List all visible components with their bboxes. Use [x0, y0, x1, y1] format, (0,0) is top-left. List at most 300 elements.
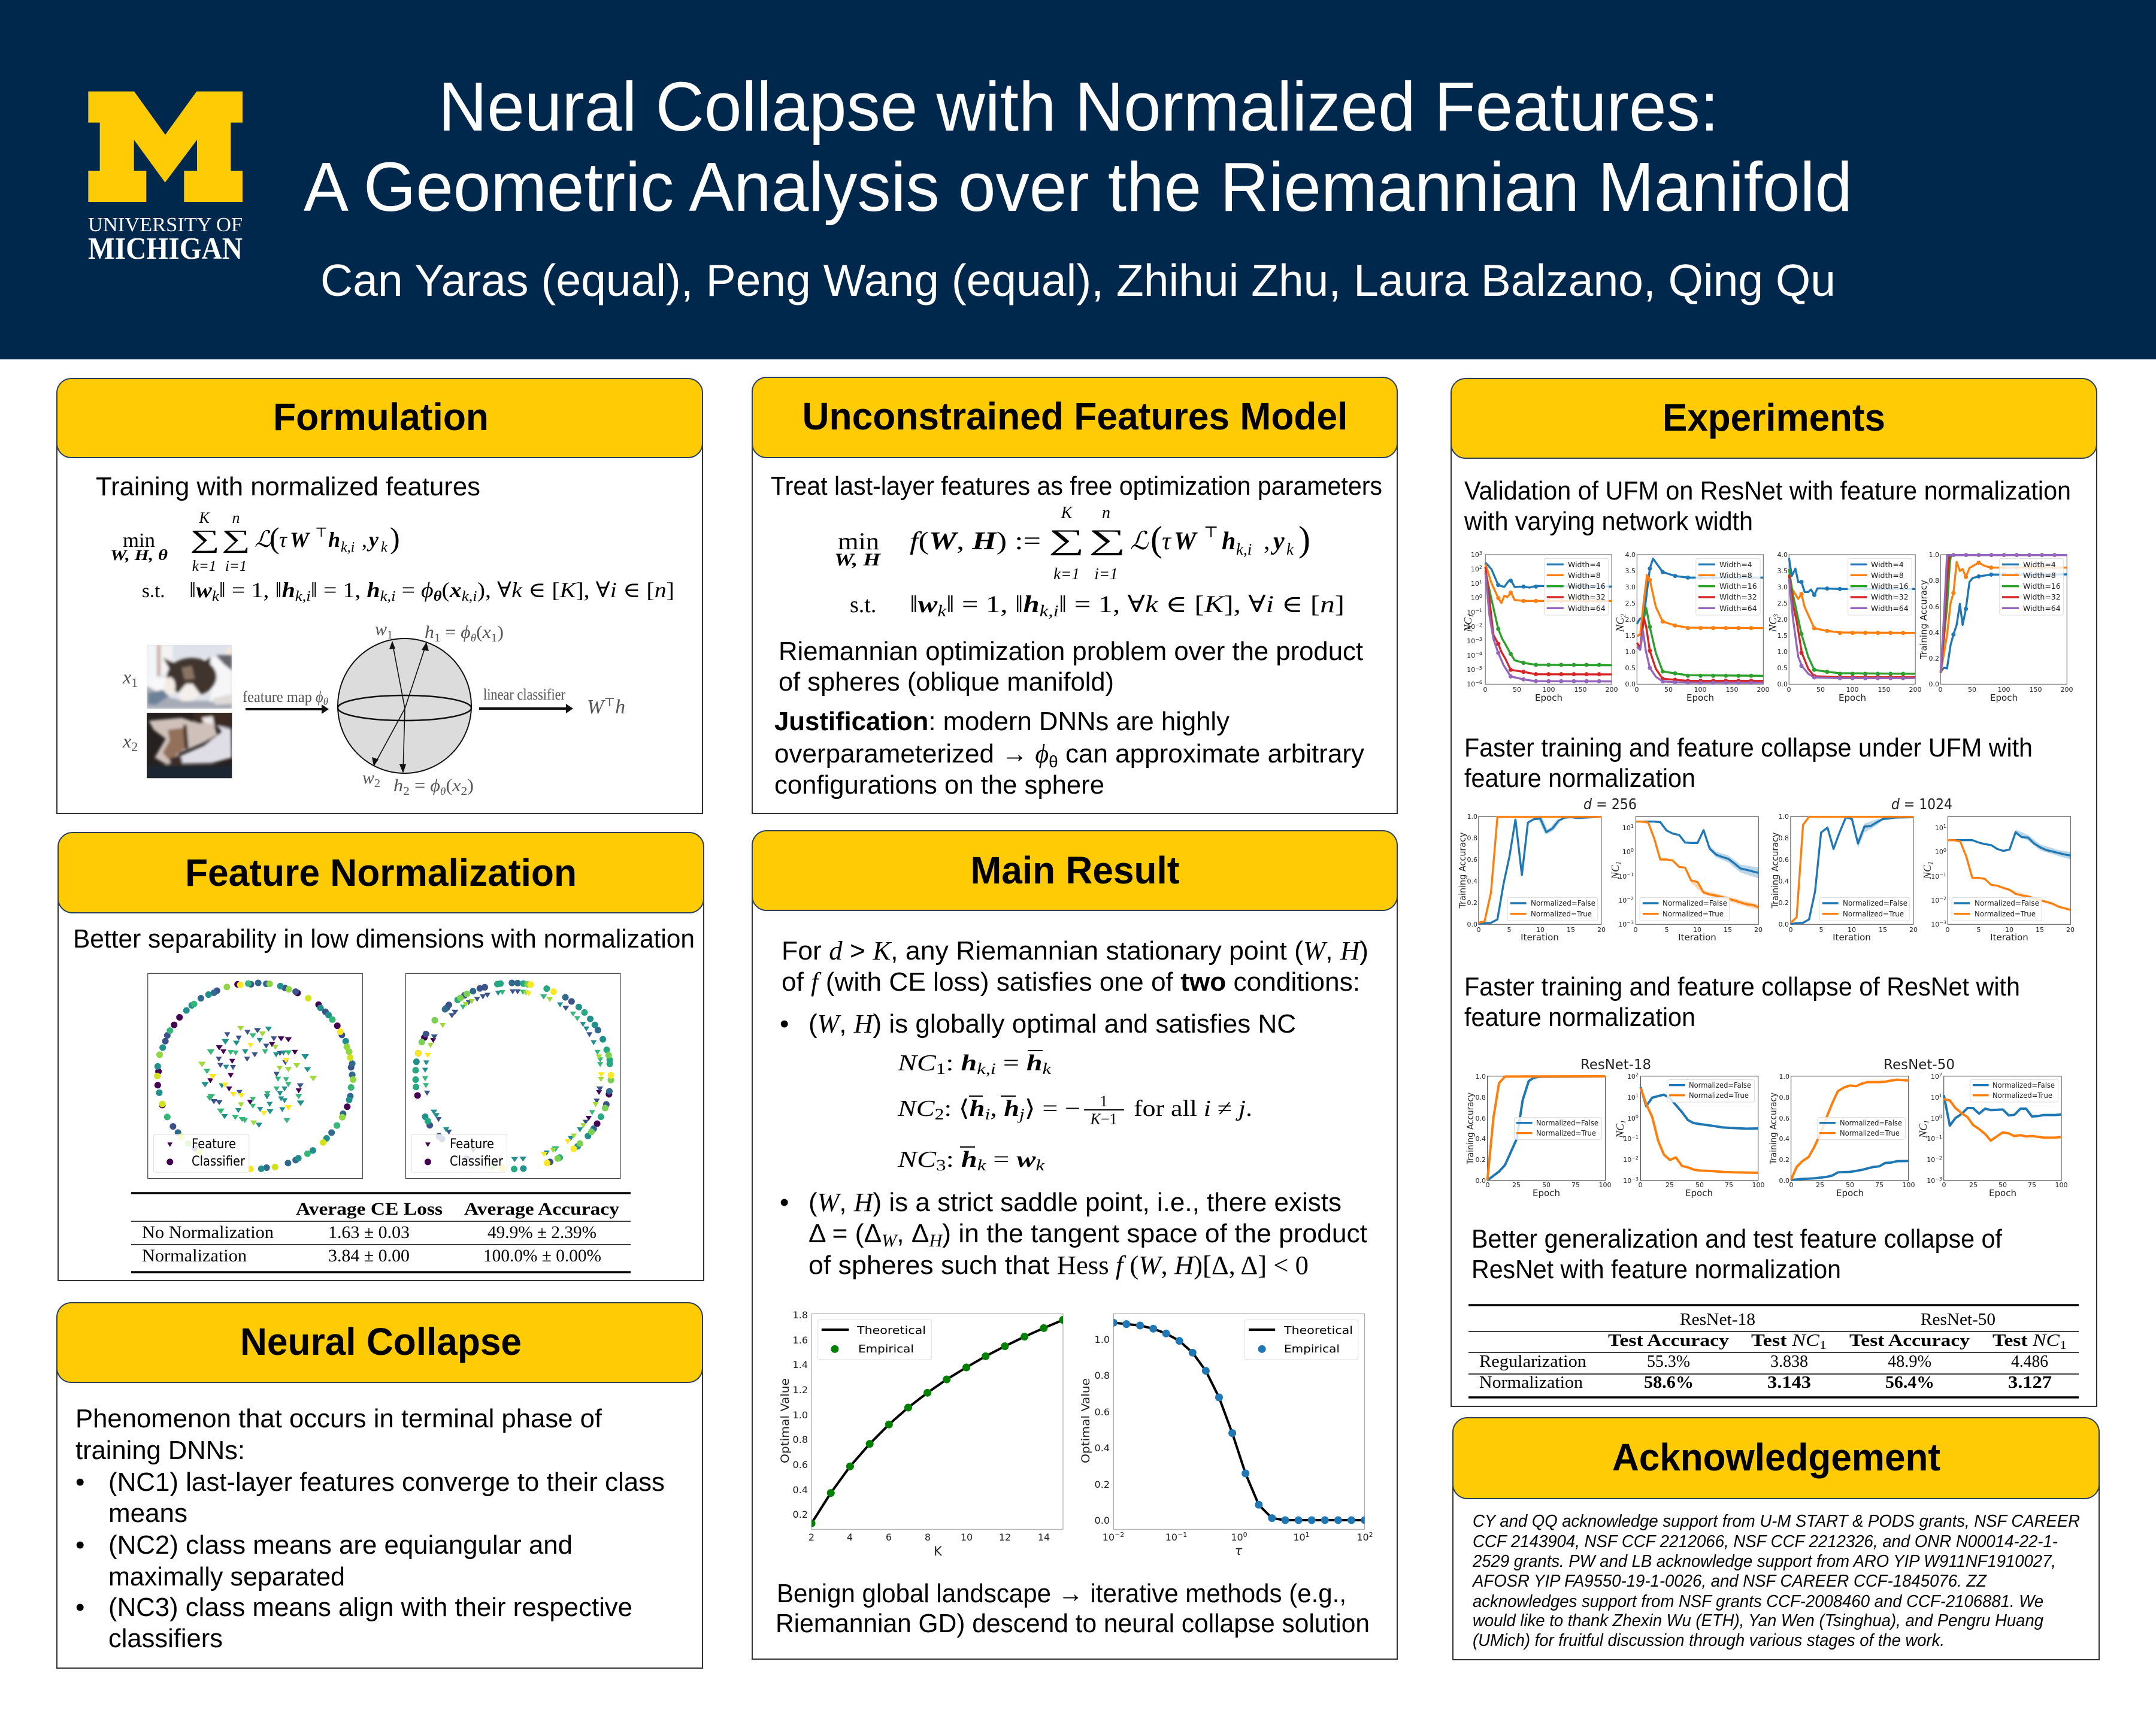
axis labels: ResNet experiments: 10 [1623, 1135, 1631, 1143]
chart: optimal value vs tau: 10 [1103, 1532, 1115, 1543]
axis labels: width experiments: Epoch [1990, 692, 2018, 703]
text: faster training of ResNet: Faster training and feature collapse of ResNet with [1464, 972, 2020, 1001]
chart: optimal value vs tau: 0.6 [1095, 1406, 1110, 1418]
axis labels: width experiments: NC [1614, 618, 1626, 632]
axis labels: width experiments: 2.5 [1778, 600, 1788, 607]
axis labels: width experiments: Width=4 [1719, 560, 1752, 569]
logo: University of Michigan: UNIVERSITY OF [88, 214, 243, 236]
axis labels: width experiments: 50 [1968, 686, 1976, 694]
axis labels: ResNet experiments: 1.0 [1779, 1073, 1789, 1081]
equation: UFM objective: W [1174, 528, 1198, 555]
axis labels: UFM experiments: Iteration [1990, 932, 2028, 943]
text: faster training of ResNet [1464, 972, 2020, 1032]
text: justification [774, 707, 1364, 800]
axis labels: ResNet experiments: Epoch [1533, 1188, 1560, 1199]
table: test accuracy and NC1: 4.486 [2011, 1352, 2048, 1371]
equation: training objective: ℒ [255, 527, 272, 552]
axis labels: ResNet experiments: −3 [1631, 1176, 1639, 1182]
table: CE loss and accuracy: 49.9% ± 2.39% [487, 1222, 596, 1242]
text: second condition: H [928, 1231, 944, 1251]
axis labels: width experiments: 10 [1471, 551, 1479, 559]
axis labels: UFM experiments: NC [1921, 865, 1933, 879]
diagram: feature map to sphere to linear classifier: 2 [461, 785, 467, 798]
axis labels: UFM experiments: −1 [1939, 872, 1946, 877]
axis labels: width experiments: 100 [1998, 686, 2010, 694]
axis labels: UFM experiments: 0.4 [1467, 877, 1477, 885]
axis labels: width experiments: 1 [1467, 614, 1475, 618]
axis labels: ResNet experiments: 2 [1636, 1072, 1639, 1078]
equations: NC1 NC2 NC3: i [985, 1106, 990, 1123]
axis labels: UFM experiments: Normalized=True [1975, 910, 2036, 918]
axis labels: width experiments: Epoch [1839, 692, 1866, 703]
equation: UFM objective: W, H [834, 550, 882, 570]
axis labels: width experiments: Width=8 [1871, 571, 1904, 580]
axis labels: ResNet experiments: 1 [1636, 1093, 1639, 1098]
axis labels: UFM experiments [1457, 795, 2075, 943]
axis labels: ResNet experiments: 0 [1639, 1181, 1642, 1189]
diagram: feature map to sphere to linear classifier: ϕ [461, 622, 470, 642]
axis labels: width experiments: 1.0 [1625, 648, 1636, 656]
equation: training objective: ( [442, 578, 450, 602]
axis labels: UFM experiments: Normalized=False [1531, 899, 1595, 907]
legend labels: scatter 2 [450, 1137, 504, 1169]
axis labels: width experiments: Width=4 [1871, 560, 1904, 569]
equations: NC1 NC2 NC3: : [946, 1051, 961, 1076]
axis labels: width experiments: Epoch [1535, 692, 1563, 703]
heading: neural collapse: Neural Collapse [240, 1320, 522, 1363]
chart: optimal value vs tau: 0 [1243, 1531, 1247, 1539]
text: training with normalized features: Training with normalized features [96, 472, 480, 501]
text: second condition: , Δ [897, 1219, 929, 1248]
text: better separability: Better separability in low dimensions with normalization [73, 924, 695, 954]
chart: optimal value vs K: 2 [808, 1532, 814, 1543]
axis labels: ResNet experiments: 0.0 [1476, 1177, 1486, 1185]
diagram: feature map to sphere to linear classifier: x [123, 666, 131, 688]
chart: NC1 ResNet-18 [1640, 1076, 1758, 1181]
axis labels: UFM experiments: 5 [1665, 926, 1669, 934]
equations: NC1 NC2 NC3: NC [897, 1147, 937, 1172]
equation: training objective: h [367, 578, 380, 602]
chart: scatter with normalization [405, 973, 620, 1178]
chart: optimal value vs tau: 0.2 [1095, 1479, 1110, 1490]
axis labels: width experiments: 0 [1483, 686, 1488, 694]
diagram: feature map to sphere to linear classifier: 2 [374, 777, 380, 790]
axis labels: width experiments: Epoch [1686, 692, 1714, 703]
axis labels: ResNet experiments: 75 [1875, 1181, 1884, 1189]
chart: optimal value vs tau: −1 [1177, 1531, 1187, 1539]
axis labels: width experiments: 10 [1471, 594, 1479, 602]
chart: optimal value vs K: K [934, 1544, 943, 1558]
equations: NC1 NC2 NC3: : [946, 1147, 961, 1172]
text: faster training under UFM [1464, 733, 2033, 793]
equation: UFM objective: ‖w [910, 591, 934, 618]
diagram: feature map to sphere to linear classifier: ( [446, 776, 452, 795]
chart: NC2 vs epoch by width [1637, 555, 1763, 684]
axis labels: ResNet experiments: 0 [1942, 1181, 1946, 1189]
axis labels: width experiments: 50 [1816, 686, 1825, 694]
axis labels: width experiments: 0.8 [1928, 577, 1939, 585]
legend labels: scatter 1: Classifier [192, 1154, 246, 1169]
axis labels: UFM experiments: 5 [1819, 926, 1823, 934]
axis labels: ResNet experiments: NC [1917, 1124, 1929, 1138]
axis labels: width experiments: 10 [1471, 565, 1479, 573]
axis labels: width experiments: 4.0 [1778, 551, 1788, 559]
text: theorem statement: of f (with CE loss) satisfies one of two conditions: [782, 967, 1360, 997]
axis labels: UFM experiments: −1 [1627, 872, 1634, 877]
equation: training objective: s.t. [142, 580, 165, 602]
equations: NC1 NC2 NC3: 3 [936, 1157, 946, 1174]
axis labels: UFM experiments: 0 [1943, 848, 1946, 853]
equations: NC1 NC2 NC3: k [1035, 1157, 1045, 1174]
equation: training objective [110, 509, 674, 604]
text: second condition: of spheres such that Hess f (W, H)[Δ, Δ] < 0 [808, 1251, 1309, 1280]
equation: training objective: ), ∀ [477, 578, 511, 602]
table: test accuracy and NC1: 55.3% [1647, 1352, 1690, 1371]
axis labels: width experiments: Width=8 [1568, 571, 1601, 580]
diagram: feature map to sphere to linear classifier: 2 [131, 739, 138, 754]
text: theorem statement [782, 936, 1368, 997]
equation: UFM objective: y [1270, 528, 1285, 555]
axis labels: UFM experiments: 0.8 [1779, 834, 1789, 842]
diagram: feature map to sphere to linear classifier: = [440, 622, 461, 642]
equation: UFM objective: n [1102, 504, 1110, 522]
axis labels: ResNet experiments: Normalized=False [1840, 1119, 1902, 1127]
equation: training objective: k ∈ [K], ∀i ∈ [n] [511, 578, 674, 602]
axis labels: UFM experiments: Iteration [1833, 932, 1871, 943]
chart: optimal value vs tau: τ [1235, 1544, 1243, 1558]
axis labels: UFM experiments: 10 [1935, 824, 1943, 832]
axis labels: ResNet experiments: −3 [1935, 1176, 1942, 1182]
text: validation of UFM: Validation of UFM on ResNet with feature normalization [1464, 476, 2071, 506]
axis labels: UFM experiments: 1 [1926, 861, 1934, 865]
axis labels: width experiments: 0 [1479, 594, 1482, 599]
diagram: feature map to sphere to linear classifier: w [375, 619, 387, 639]
title: Neural Collapse with Normalized Features: [438, 68, 1719, 146]
text: neural collapse description: Phenomenon that occurs in terminal phase of [75, 1404, 602, 1433]
axis labels: ResNet experiments: 0.4 [1779, 1135, 1789, 1143]
chart: optimal value vs K: 1.6 [793, 1334, 808, 1346]
table: test accuracy and NC1: ResNet-18 [1680, 1311, 1755, 1329]
axis labels: UFM experiments: d = 1024 [1891, 795, 1952, 813]
axis labels: ResNet experiments: 0.0 [1779, 1177, 1789, 1185]
axis labels: UFM experiments: 0.0 [1467, 921, 1477, 928]
axis labels: UFM experiments: Normalized=True [1531, 910, 1592, 918]
axis labels: UFM experiments: 1.0 [1779, 813, 1789, 821]
axis labels: width experiments: Width=32 [1719, 592, 1757, 601]
chart group: ResNet experiments [1465, 1057, 2067, 1199]
axis labels: UFM experiments: Iteration [1678, 932, 1716, 943]
text: faster training under UFM: Faster training and feature collapse under UFM with [1464, 733, 2033, 762]
equation: training objective: K [198, 509, 210, 526]
chart: optimal value vs K: 1.8 [793, 1309, 808, 1321]
axis labels: width experiments: 0.5 [1778, 664, 1788, 672]
text: acknowledgement body: CY and QQ acknowledge support from U-M START & PODS grants, NSF CAREER [1473, 1512, 2080, 1531]
equation: training objective: ( [270, 521, 280, 555]
diagram: feature map to sphere to linear classifier: 1 [131, 675, 138, 690]
equations: NC1 NC2 NC3: k [1042, 1060, 1052, 1078]
table: test accuracy and NC1: Test NC [1751, 1331, 1814, 1350]
axis labels: width experiments: 150 [1574, 686, 1587, 694]
diagram: feature map to sphere to linear classifier: 1 [387, 628, 393, 641]
equations: NC1 NC2 NC3: = [996, 1051, 1026, 1076]
axis labels: ResNet experiments: 25 [1512, 1181, 1521, 1189]
diagram: feature map to sphere to linear classifier: W [587, 696, 604, 718]
chart: optimal value vs tau: 2 [1369, 1531, 1373, 1539]
table: test accuracy and NC1: Test NC [1993, 1331, 2055, 1350]
axis labels: ResNet experiments: 75 [1571, 1181, 1580, 1189]
equation: training objective: k [212, 589, 219, 604]
authors: Can Yaras (equal), Peng Wang (equal), Zhihui Zhu, Laura Balzano, Qing Qu [320, 255, 1836, 305]
heading: main result: Main Result [970, 849, 1180, 892]
diagram: feature map to sphere to linear classifier: = [410, 776, 430, 795]
axis labels: width experiments: 2 [1619, 614, 1627, 618]
chart: optimal value vs tau: 0.8 [1095, 1370, 1110, 1381]
equation: training objective: ‖ = 1, [311, 578, 367, 602]
diagram: feature map to sphere to linear classifier: h [425, 622, 434, 642]
text: neural collapse description: (NC1) last-layer features converge to their class [108, 1467, 665, 1497]
axis labels: UFM experiments: 20 [1909, 926, 1918, 934]
equation: UFM objective: k=1 [1053, 565, 1080, 583]
text: better generalization: Better generalization and test feature collapse of [1471, 1224, 2003, 1254]
axis labels: ResNet experiments: 0.6 [1476, 1115, 1486, 1122]
chart: optimal value vs K: 0.2 [793, 1509, 808, 1520]
chart: optimal value vs tau [1079, 1314, 1373, 1558]
chart: optimal value vs K: 4 [847, 1532, 853, 1543]
text: justification: overparameterized → ϕ [774, 739, 1049, 768]
axis labels: width experiments: 3.5 [1778, 567, 1788, 575]
axis labels: UFM experiments: −2 [1939, 896, 1946, 901]
text: benign global landscape: Riemannian GD) descend to neural collapse solution [776, 1609, 1370, 1638]
axis labels: UFM experiments: 0.2 [1779, 899, 1789, 907]
equation: training objective: k,i [380, 589, 396, 604]
arrow: feature map [246, 708, 323, 710]
equation: training objective: τ [279, 528, 287, 552]
axis labels: UFM experiments: 1 [1943, 824, 1946, 829]
axis labels: width experiments: 1.5 [1778, 632, 1788, 640]
diagram: feature map to sphere to linear classifier: θ [471, 632, 476, 644]
axis labels: width experiments: 1.0 [1928, 551, 1939, 559]
equation: training objective: ∑ [190, 525, 220, 553]
axis labels: ResNet experiments: 0.8 [1779, 1094, 1789, 1101]
axis labels: width experiments: 3.0 [1625, 583, 1636, 591]
text: neural collapse description [75, 1404, 665, 1653]
diagram: feature map to sphere to linear classifier: w [362, 768, 374, 788]
chart: optimal value vs tau: 1.0 [1095, 1334, 1110, 1345]
axis labels: UFM experiments: 15 [1879, 926, 1887, 934]
axis labels: ResNet experiments: 0 [1789, 1181, 1793, 1189]
text: riemannian optimization problem: of spheres (oblique manifold) [779, 667, 1114, 697]
axis labels: UFM experiments: Normalized=False [1843, 899, 1907, 907]
axis labels: width experiments: 3.0 [1778, 583, 1788, 591]
text: acknowledgement body: AFOSR YIP FA9550-19-1-0026, and NSF CAREER CCF-1845076. ZZ [1471, 1572, 1988, 1591]
equations: NC1 NC2 NC3 [897, 1051, 1252, 1174]
table: test accuracy and NC1 [1468, 1305, 2079, 1397]
table: test accuracy and NC1: 3.838 [1770, 1352, 1808, 1371]
text: acknowledgement body [1471, 1512, 2080, 1650]
diagram: feature map to sphere to linear classifier: x [123, 730, 131, 752]
table: CE loss and accuracy: Average CE Loss [296, 1199, 443, 1219]
equations: NC1 NC2 NC3: 1 [1100, 1092, 1108, 1110]
axis labels: ResNet experiments: −1 [1935, 1134, 1942, 1140]
axis labels: UFM experiments: Normalized=False [1975, 899, 2039, 907]
axis labels: ResNet experiments [1465, 1057, 2067, 1199]
equations: NC1 NC2 NC3: h [1004, 1096, 1019, 1121]
axis labels: width experiments: 10 [1467, 680, 1475, 688]
equation: training objective: k [381, 540, 387, 555]
axis labels: ResNet experiments: 0.2 [1476, 1156, 1486, 1164]
axis labels: width experiments: 0.0 [1778, 680, 1788, 688]
axis labels: ResNet experiments: 25 [1969, 1181, 1978, 1189]
axis labels: width experiments: 0.5 [1625, 664, 1636, 672]
axis labels: width experiments: 0.0 [1625, 680, 1636, 688]
table: CE loss and accuracy: No Normalization [142, 1222, 274, 1242]
axis labels: width experiments: 10 [1467, 623, 1475, 631]
equation: training objective: ) [390, 521, 400, 555]
axis labels: ResNet experiments: 10 [1931, 1073, 1939, 1081]
axis labels: ResNet experiments: Normalized=True [1993, 1091, 2052, 1100]
axis labels: ResNet experiments: Epoch [1836, 1188, 1864, 1199]
diagram: feature map to sphere to linear classifier: 2 [403, 785, 410, 798]
equation: UFM objective: k,i [1236, 540, 1252, 558]
equation: training objective: ‖w [189, 578, 210, 602]
equation: training objective: n [232, 509, 240, 526]
axis labels: width experiments: 150 [2029, 686, 2042, 694]
axis labels: ResNet experiments: 75 [2028, 1181, 2036, 1189]
axis labels: width experiments: 1.5 [1625, 632, 1636, 640]
axis labels: width experiments: 10 [1467, 637, 1475, 645]
text: second condition: ) in the tangent space of the product [942, 1219, 1367, 1248]
axis labels: width experiments: −5 [1475, 665, 1482, 671]
axis labels: ResNet experiments: 50 [1998, 1181, 2007, 1189]
text: second condition: W [882, 1231, 898, 1251]
equation: training objective: h [282, 578, 295, 602]
legend labels: scatter 2: Classifier [450, 1154, 504, 1169]
axis labels: UFM experiments: Normalized=True [1663, 910, 1724, 918]
table: test accuracy and NC1: 3.127 [2008, 1373, 2052, 1392]
chart: accuracy d=1024 [1791, 816, 1913, 924]
chart: NC1 d=256 [1636, 816, 1758, 924]
equation: UFM objective: k [1286, 540, 1294, 558]
axis labels: UFM experiments: 10 [1848, 926, 1856, 934]
chart: training accuracy vs epoch by width [1940, 555, 2067, 684]
panel: experiments [1451, 379, 2097, 1406]
axis labels: ResNet experiments: 50 [1542, 1181, 1551, 1189]
text: second condition [780, 1188, 1367, 1280]
chart: optimal value vs K: Theoretical [856, 1324, 926, 1337]
chart: optimal value vs tau: −2 [1115, 1531, 1124, 1539]
axis labels: width experiments: 0.6 [1928, 603, 1939, 611]
equation: UFM objective: k,i [1040, 602, 1059, 620]
axis labels: UFM experiments: 10 [1622, 848, 1631, 856]
equation: training objective: y [367, 528, 379, 552]
axis labels: UFM experiments: 0.6 [1467, 856, 1477, 864]
chart: optimal value vs K: 0.4 [793, 1484, 808, 1496]
axis labels: width experiments: 0.0 [1928, 680, 1939, 688]
axis labels: ResNet experiments: NC [1614, 1124, 1626, 1138]
chart: NC1 vs epoch by width [1485, 555, 1612, 684]
equation: UFM objective: ) [1298, 519, 1310, 559]
chart: optimal value vs tau: 10 [1165, 1532, 1177, 1543]
axis labels: UFM experiments: 5 [1507, 926, 1512, 934]
axis labels: width experiments: Width=4 [1568, 560, 1601, 569]
axis labels: width experiments: 0 [1787, 686, 1791, 694]
axis labels: width experiments: Width=16 [1871, 582, 1909, 591]
axis labels: ResNet experiments: Normalized=False [1689, 1081, 1751, 1090]
diagram: feature map to sphere to linear classifier: 1 [434, 631, 440, 644]
axis labels: width experiments: Width=64 [1719, 604, 1757, 613]
axis labels: width experiments: 200 [1605, 686, 1618, 694]
axis labels: ResNet experiments: 0.4 [1476, 1135, 1486, 1143]
axis labels: ResNet experiments: 25 [1816, 1181, 1824, 1189]
axis labels: width experiments: Width=16 [2023, 582, 2061, 591]
axis labels: width experiments: 50 [1513, 686, 1521, 694]
axis labels: width experiments: 200 [1757, 686, 1769, 694]
axis labels: ResNet experiments: 10 [1623, 1177, 1631, 1185]
axis labels: width experiments: Width=16 [1719, 582, 1757, 591]
diagram: feature map to sphere to linear classifier: x [483, 622, 490, 642]
chart: optimal value vs tau: Theoretical [1283, 1324, 1353, 1337]
text: neural collapse description: (NC2) class means are equiangular and [108, 1530, 573, 1560]
axis labels: width experiments: 150 [1726, 686, 1738, 694]
panel: acknowledgement [1453, 1418, 2099, 1660]
equation: UFM objective: ∑ [1049, 524, 1085, 556]
axis labels: UFM experiments: Training Accuracy [1457, 832, 1468, 909]
axis labels: width experiments: −1 [1475, 608, 1482, 613]
equation: UFM objective: h [1222, 528, 1236, 555]
axis labels: width experiments: −6 [1475, 680, 1482, 685]
equations: NC1 NC2 NC3: h [1026, 1051, 1042, 1076]
axis labels: UFM experiments: 10 [1536, 926, 1545, 934]
axis labels: width experiments: 50 [1664, 686, 1673, 694]
legend labels: scatter 1 [192, 1137, 246, 1169]
axis labels: width experiments: 0 [1635, 686, 1639, 694]
arrow: linear classifier [479, 707, 568, 710]
diagram: feature map to sphere to linear classifier [122, 619, 625, 798]
axis labels: width experiments: Width=8 [2023, 571, 2056, 580]
chart: optimal value vs tau: Empirical [1284, 1343, 1340, 1355]
equations: NC1 NC2 NC3: K−1 [1089, 1110, 1118, 1128]
axis labels: UFM experiments: 5 [1976, 926, 1981, 934]
chart: optimal value vs K: 0.8 [793, 1434, 808, 1445]
equations: NC1 NC2 NC3: NC [897, 1051, 937, 1076]
chart: optimal value vs K: Empirical [858, 1343, 914, 1355]
table: test accuracy and NC1: 1 [1819, 1339, 1827, 1352]
axis labels: width experiments: Width=4 [2023, 560, 2056, 569]
chart: optimal value vs K: 10 [961, 1532, 973, 1543]
title [304, 68, 1852, 226]
diagram: feature map to sphere to linear classifier: h [615, 696, 625, 718]
axis labels: UFM experiments: 10 [1935, 848, 1943, 856]
text: acknowledgement body: CCF 2143904, NSF CCF 2212066, NSF CCF 2212326, and ONR N00014-22-1- [1473, 1532, 2058, 1551]
axis labels: width experiments: Width=32 [2023, 592, 2061, 601]
axis labels: width experiments: 100 [1846, 686, 1859, 694]
chart: optimal value vs tau: 10 [1231, 1532, 1243, 1543]
axis labels: width experiments: 200 [1909, 686, 1921, 694]
text: second condition: Δ = (Δ [808, 1219, 881, 1248]
equations: NC1 NC2 NC3: , [990, 1096, 1004, 1121]
diagram: feature map to sphere to linear classifier: h [393, 776, 402, 795]
text: justification: can approximate arbitrary [1058, 739, 1364, 768]
text: faster training under UFM: feature normalization [1464, 764, 1695, 793]
chart: optimal value vs K: 1.0 [793, 1409, 808, 1421]
text: neural collapse description: means [108, 1499, 187, 1528]
heading: formulation: Formulation [273, 395, 489, 438]
axis labels: width experiments: 10 [1471, 580, 1479, 588]
equation: UFM objective [834, 504, 1345, 620]
axis labels: ResNet experiments: ResNet-50 [1884, 1057, 1955, 1073]
axis labels: UFM experiments: 10 [1931, 873, 1939, 880]
axis labels: UFM experiments: 10 [2005, 926, 2013, 934]
